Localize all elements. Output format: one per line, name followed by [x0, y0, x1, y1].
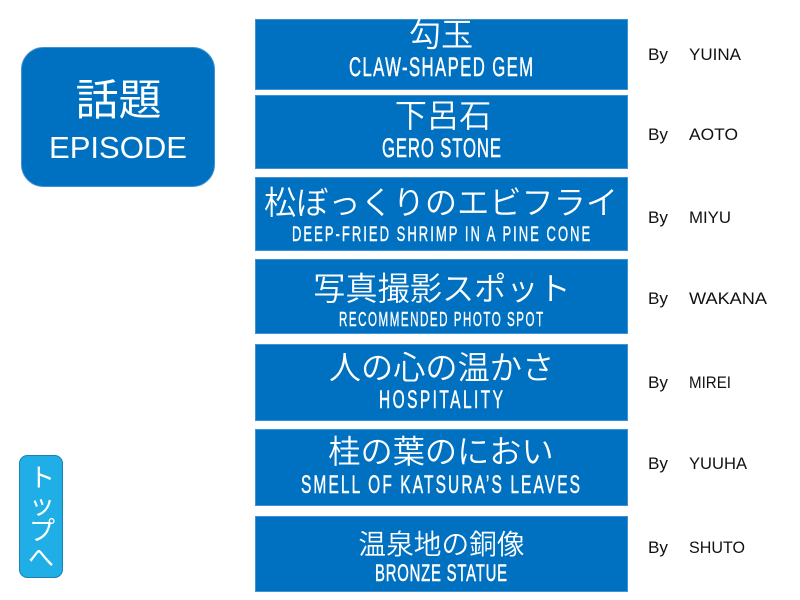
credit: Yuuha: YUUHA [689, 454, 748, 473]
credit: Yuina: YUINA [689, 45, 742, 64]
credit: Shuto: SHUTO [689, 538, 745, 557]
heading panel: episode: EPISODE [49, 130, 187, 165]
credit: Yuina: By [648, 45, 668, 64]
row: bronze statue: BRONZE STATUE [375, 561, 507, 587]
row: hospitality: HOSPITALITY [379, 386, 503, 414]
row: hospitality: 人の心の温かさ [329, 350, 554, 386]
credit: Wakana [648, 289, 768, 308]
row: bronze statue [256, 516, 628, 592]
credit: Miyu: By [648, 208, 668, 227]
heading panel: episode: 話題 [76, 77, 162, 125]
row: gero stone: GERO STONE [382, 133, 501, 163]
row: claw-shaped gem [256, 17, 628, 90]
credit: Mirei: MIREI [689, 373, 731, 392]
row: deep-fried shrimp in a pine cone [256, 178, 628, 250]
credit: Yuina [648, 45, 742, 64]
row: smell of katsura's leaves [256, 430, 628, 506]
button: back to top: ト [29, 463, 55, 493]
row: recommended photo spot [256, 260, 628, 334]
button: back to top [20, 456, 62, 578]
row: gero stone: 下呂石 [395, 98, 491, 134]
button: back to top: プ [29, 516, 55, 546]
button: back to top: ッ [29, 490, 55, 520]
credit: Aoto [648, 125, 738, 144]
row: deep-fried shrimp in a pine cone: 松ぼっくりのエビフライ [264, 185, 618, 221]
credit: Aoto: AOTO [689, 125, 738, 144]
row: recommended photo spot: 写真撮影スポット [313, 271, 571, 307]
row: gero stone [256, 96, 628, 168]
row: smell of katsura's leaves: 桂の葉のにおい [328, 434, 554, 470]
row: recommended photo spot: RECOMMENDED PHOTO SPOT [339, 309, 543, 331]
credit: Wakana: By [648, 289, 668, 308]
credit: Shuto: By [648, 538, 668, 557]
credit: Miyu: MIYU [689, 208, 731, 227]
row: bronze statue: 温泉地の銅像 [358, 529, 525, 560]
button: back to top: へ [28, 543, 54, 573]
credit: Yuuha [648, 454, 748, 473]
credit: Miyu [648, 208, 731, 227]
heading panel: episode [22, 48, 214, 186]
row: deep-fried shrimp in a pine cone: DEEP-FRIED SHRIMP IN A PINE CONE [292, 222, 590, 246]
credit: Mirei: By [648, 373, 668, 392]
row: claw-shaped gem: CLAW-SHAPED GEM [349, 52, 533, 82]
row: hospitality [256, 344, 628, 420]
row: smell of katsura's leaves: SMELL OF KATSURA’S LEAVES [301, 471, 580, 499]
credit: Shuto [648, 538, 745, 557]
credit: Aoto: By [648, 125, 668, 144]
credit: Wakana: WAKANA [689, 289, 768, 308]
credit: Yuuha: By [648, 454, 668, 473]
credit: Mirei [648, 373, 731, 392]
row: claw-shaped gem: 勾玉 [409, 17, 473, 53]
